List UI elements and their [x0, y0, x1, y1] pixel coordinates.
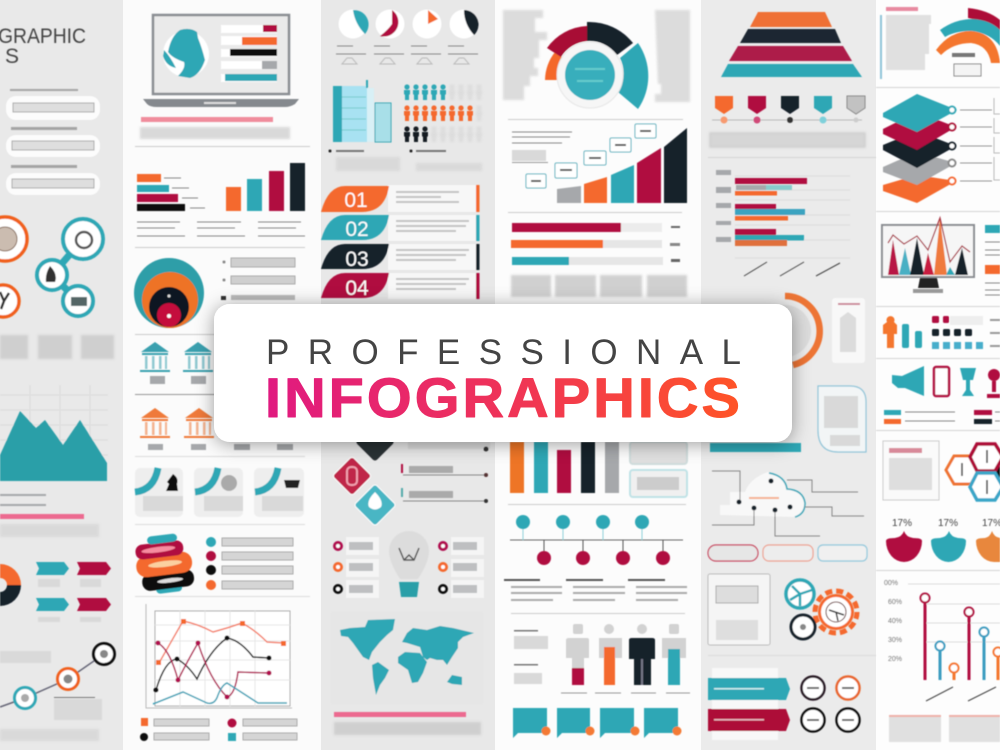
- outlined pills: [708, 545, 867, 561]
- small rings: [802, 676, 860, 732]
- pins row: [708, 96, 876, 158]
- footer blocks: [889, 715, 1000, 742]
- buildings: [333, 80, 391, 142]
- notes: [328, 150, 482, 171]
- bulb option rows: [334, 537, 484, 598]
- lollipop chart: [884, 580, 1000, 701]
- world map: [331, 612, 483, 704]
- numbered list: 04: [345, 277, 369, 300]
- lollipop chart: 40%: [888, 618, 902, 625]
- node timeline: [0, 644, 114, 741]
- numbered list: 02: [345, 218, 369, 241]
- side text blocks: [503, 10, 690, 102]
- mountain chart: [0, 385, 108, 481]
- figure card: [832, 298, 865, 363]
- teal bar: [710, 443, 801, 452]
- text pills: [6, 89, 100, 195]
- chart legend: [140, 718, 297, 741]
- progress bars: [511, 223, 680, 265]
- three cards: [135, 468, 304, 517]
- lollipop chart: 00%: [884, 580, 898, 587]
- panel: column four: [503, 10, 690, 738]
- lollipop chart: 20%: [888, 656, 902, 663]
- pyramid: [721, 12, 862, 77]
- people chart: [514, 624, 690, 693]
- title line two: INFOGRAPHICS: [265, 366, 743, 429]
- three text columns: [504, 580, 687, 614]
- caption: [0, 494, 99, 537]
- arrow ribbons: [36, 562, 111, 622]
- note card: [883, 441, 939, 500]
- concentric arcs: [876, 7, 1000, 88]
- percent drops: 17%: [892, 518, 912, 529]
- lightbulb: [389, 531, 429, 597]
- percent drops: 17%: [938, 518, 958, 529]
- gray blocks: [0, 335, 114, 359]
- percent drops: [876, 518, 1000, 571]
- horizontal bars: [716, 170, 850, 276]
- lollipop chart: 30%: [888, 637, 902, 644]
- panel: column six: [876, 7, 1000, 742]
- sphere legend: [206, 537, 293, 590]
- title card: [214, 304, 792, 442]
- temples: [135, 342, 305, 457]
- ribbon banners: [708, 668, 790, 740]
- hexagons: [946, 444, 1000, 500]
- gray blocks: [511, 275, 687, 297]
- people rows: [404, 84, 482, 142]
- map caption: [334, 712, 481, 735]
- panel: column two: [133, 15, 310, 741]
- lollipop chart: 60%: [888, 599, 902, 606]
- list rows: [135, 258, 295, 335]
- note card: [708, 574, 770, 645]
- title line one: PROFESSIONAL: [266, 333, 741, 372]
- panel: column five: [708, 12, 876, 740]
- panel: column three: [321, 10, 490, 735]
- laptop: [143, 15, 299, 107]
- nested circles: [134, 258, 204, 328]
- heading fragment: GRAPHIC: [0, 25, 86, 48]
- document outline: [818, 386, 866, 452]
- radial diagram: [545, 22, 648, 109]
- monitor side text: [876, 225, 1000, 307]
- numbered list: [321, 185, 480, 300]
- icon network: [0, 217, 103, 317]
- gears: [708, 580, 876, 656]
- bar charts: [135, 163, 305, 248]
- color legend: [876, 410, 1000, 431]
- diamonds: [332, 422, 490, 526]
- four pie charts: [336, 10, 478, 64]
- donut: [0, 564, 21, 606]
- icon row: [892, 366, 1000, 396]
- speech bubbles: [513, 708, 682, 738]
- orange ring gauge: [759, 296, 820, 365]
- card background: [214, 304, 792, 442]
- numbered list: 01: [344, 189, 368, 212]
- growth chart: [508, 119, 687, 213]
- striped sphere: [133, 524, 310, 597]
- caption: [135, 117, 310, 147]
- numbered list: 03: [345, 248, 369, 271]
- timeline: [510, 515, 683, 565]
- panel: column one: [0, 25, 114, 741]
- ring labels: [807, 687, 854, 721]
- line chart: [146, 604, 292, 708]
- lower column bars: [508, 442, 687, 505]
- cloud diagram: [712, 471, 864, 536]
- heading fragment letter: S: [5, 45, 19, 68]
- monitor: [882, 218, 974, 293]
- small stats: [876, 316, 1000, 359]
- layered stack: [876, 94, 1000, 212]
